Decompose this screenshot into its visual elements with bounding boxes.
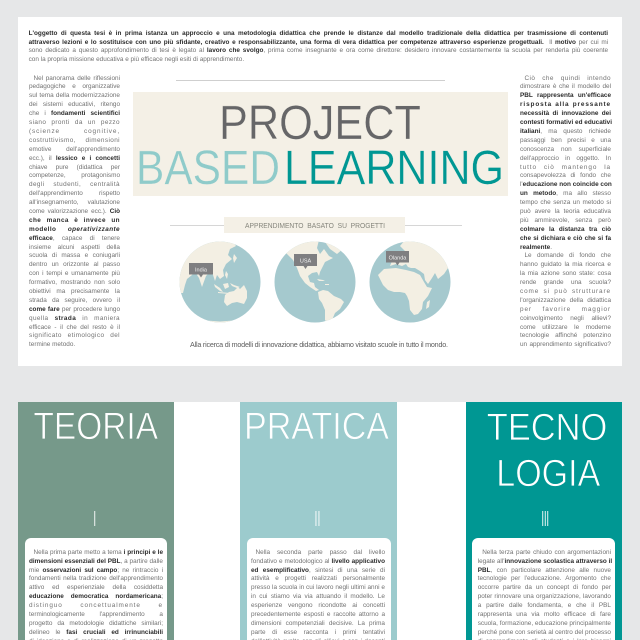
icon: globe India [178,240,260,324]
text block: TECNOLOGIA [478,549,612,640]
text block: left column: degli studenti, centralità [29,181,120,188]
tag: India [189,263,213,278]
text block: right column: tempo che senza un metodo si [520,199,611,206]
tag: USA: USA [300,258,311,264]
text block: right column: un metodo, ma allo stesso [520,190,611,197]
heading: TECNOLOGIA with numeral III: LOGIA [496,453,601,495]
text block: TECNOLOGIA: occorre partire da un concept di fondo per [478,584,611,591]
text block: right column: più ammirevole, senza però [520,217,611,224]
text block: PRATICA: parte di esse racconta i primi tentativi [251,629,385,636]
text block: left column: modello operativizzante [29,226,120,233]
text block: introduction: attraverso lezioni e lo sostituisce con uno più sfidante, creativo e responsabilizzante, una forma di vera didattica per competenze attraverso esperienze progettuali. Il motivo per cui mi [29,39,608,46]
panel: TECNOLOGIA [466,402,622,640]
tag: Olanda [386,251,409,266]
text block: introduction [28,30,608,63]
text block: TEORIA: dimensioni essenziali del PBL, a partire dalle [29,558,163,565]
panel: top white sheet [18,17,622,366]
text block: left column: pedagogiche e organizzative [29,83,120,90]
text block: right column: che si dichiara e ciò che si fa [520,235,611,242]
text block: PRATICA: precedentemente esposti e raccolte attorno a [251,611,385,618]
text block: PRATICA [251,549,385,640]
text block: left column: significato etimologico del [29,332,120,339]
panel: lower white sheet [18,402,622,640]
text block: left column: sul tema della modernizzazione [29,92,120,99]
text block: TECNOLOGIA: rappresenta una via molto efficace di fare [478,611,611,618]
text block: PRATICA: Nella seconda parte passo dal livello [256,549,385,556]
text block: TEORIA: delineo le fasi cruciali ed irrinunciabili [29,629,163,636]
text block: TECNOLOGIA: tecnologie per l'educazione. Argomento che [478,575,611,582]
text block: right column: tecnologie affinché potenzino [520,332,611,339]
text block: right column: risposta alla pressante [520,101,611,108]
panel: TEORIA [18,402,174,640]
tag: India: India [195,268,208,274]
text block: left column: Nel panorama delle riflessioni [34,75,120,82]
text block: left column: all'insegnamento, valutazione [29,199,120,206]
text block: left column: dell'apprendimento rispetto [29,190,120,197]
text block: left column: costruttivismo, dimensioni [29,137,120,144]
text block: PRATICA: presso la scuola in cui lavoro negli ultimi anni e [251,584,385,591]
title: PROJECT: PROJECT [219,97,421,150]
text block: right column: può avere la teoria educativa [520,208,611,215]
subtitle ribbon [170,217,462,233]
text block: TECNOLOGIA: perché pone con serietà al centro del processo [478,629,611,636]
text block: right column: italiani, ma questo richiede [520,128,611,135]
text block: introduction: sono dedicato a questo approfondimento di tesi è legato al lavoro che svolgo, prima come insegnante e ora come direttore: desidero innovare costantemente la scuola per renderla più coerente [29,47,608,54]
text block: TECNOLOGIA: Nella terza parte chiudo con argomentazioni [482,549,611,556]
text block: left column: che manca è invece un [29,217,120,224]
text block: right column: conoscenza non superficiale [520,146,611,153]
text block: left column [29,75,120,348]
text block: right column: necessità di innovazione dei [520,110,611,117]
text block: left column: quella strada in maniera [29,315,120,322]
text block: right column: tutto ciò mantengo la [520,164,611,170]
text block: PRATICA: attività e progetti realizzati personalmente [251,575,385,582]
text block: TEORIA: distinguo concettualmente e [29,602,163,609]
text block: TECNOLOGIA: legate all'innovazione scolastica attraverso il [478,558,612,565]
text block: TEORIA: Nella prima parte metto a tema i principi e le [34,549,163,556]
tag: Olanda: Olanda [389,256,407,262]
text block: right column: come utilizzare le moderne [520,324,611,331]
text block: TECNOLOGIA: PBL, con particolare attenzione alle nuove [478,567,611,574]
text block: left column: ecc.), il lessico e i concetti [29,155,120,162]
card: PRATICA text [247,538,391,640]
text block: right column: passaggi ben precisi e una [520,137,611,144]
text block: right column: la mia azione sono state: cosa [520,270,611,277]
text block: TEORIA: fondamenti nella tradizione dell'apprendimento [29,575,163,582]
text block: right column [520,75,612,348]
text block: left column: dei sistemi educativi, ritengo [29,101,120,108]
text block: left column: efficace - il che del resto è il [29,324,120,331]
tag: USA [294,254,317,269]
text block: left column: competenze, protagonismo [29,172,120,179]
text block: left column: (scienze cognitive, [29,128,120,135]
title: BASED LEARNING [136,142,504,195]
text block: PRATICA: ed esemplificativo, sintesi di una serie di [251,567,385,574]
text block: right column: un apprendimento significativo? [520,341,611,348]
text block: right column: realmente. [520,244,552,251]
icon: globe Olanda [370,240,452,322]
text block: TECNOLOGIA: a partire dalle fondamenta, e che il PBL [478,602,611,609]
text block: TEORIA: educazione democratica nordamericana; [29,593,163,600]
text block: left column: come fare per procedere lungo [29,306,120,313]
text block: left column: che i fondamenti scientifici [29,110,120,117]
text block: introduction: L'oggetto di questa tesi è in prima istanza un approccio e una metodologia didattica che prende le distanze dal modello tradizionale della didattica per trasmissione di contenuti [29,30,608,37]
text block: TEORIA: mie osservazioni sul campo; ne rintraccio i [29,567,163,574]
text block: right column: consapevolezza di fondo che [520,172,611,179]
text block: left column: come valorizzazione ecc.). Ciò [29,208,120,215]
panel: PRATICA [240,402,397,640]
text block: right column: coinvolgimento negli allievi? [520,315,611,322]
text block: right column: rende grande una scuola? [520,279,611,286]
text block: left column: con i tempi e umanamente più [29,270,120,277]
text block: TEORIA: progetto da metodologie didattiche similari; [29,620,163,627]
text block: right column: dell'approccio in oggetto. In [520,155,611,162]
text block: TEORIA: attivo ed esperienziale della cosiddetta [29,584,163,591]
text block: left column: dentro un orizzonte al passo [29,261,120,268]
text block: TECNOLOGIA: poter rinnovare una organizzazione, lavorando [478,593,611,600]
text block: left column: chiave pure (didattica per [29,164,120,170]
text block: right column: come si può strutturare [520,288,611,295]
text block: right column: Le domande di fondo che [524,252,611,259]
heading: TECNOLOGIA with numeral III: TECNO [486,407,607,449]
heading: TECNOLOGIA with numeral III [486,407,607,526]
text block: PRATICA: fondativo e metodologico al livello applicativo [251,558,385,565]
caption: Alla ricerca di modelli di innovazione didattica, abbiamo visitato scuole in tutto il mondo. [190,340,448,349]
text block: right column: dimostrare è che il modello del [520,83,611,90]
text block: left column: efficace, capace di tenere [29,235,120,242]
card: TEORIA text [24,538,167,640]
text block: right column: colmare la distanza tra ciò [520,226,611,233]
text block: left column: termine metodo. [29,341,75,348]
text block: left column: siano pronti da un pezzo [29,119,120,126]
divider: top rule [176,80,445,81]
text block: TECNOLOGIA: scuola, formazione, educazione principalmente [478,620,611,627]
text block: left column: formativo, mostrando non solo [29,279,120,286]
text block: right column: hanno guidato la mia ricerca e [520,261,611,268]
text block: PRATICA: esperienze vengono ricondotte ai concetti [251,602,385,609]
text block: left column: insieme alcuni aspetti della [29,244,120,251]
text block: introduction: con la propria missione educativa e più efficace negli esiti di apprendimento. [29,56,244,63]
text block: left column: emotive dell'apprendimento [29,146,120,153]
title banner [133,92,508,196]
text block: right column: l'educazione non coincide con [520,181,612,188]
text block: right column: contesti formativi ed educativi [520,119,612,126]
text block: PRATICA: in cui stiamo via via attuando il modello. Le [251,593,385,600]
text block: TEORIA: terminologicamente l'apprendimento a [29,611,163,618]
subtitle ribbon: APPRENDIMENTO BASATO SU PROGETTI [245,221,385,230]
text block: right column: Ciò che quindi intendo [524,75,611,82]
text block: right column: PBL rappresenta un'efficace [520,92,611,99]
text block: left column: obiettivi ma precisamente la [29,288,120,295]
card: TECNOLOGIA text [472,538,615,640]
icon: globe USA [274,240,356,324]
text block: left column: scuola di massa e coniugarli [29,252,120,259]
globes with location tags [180,242,450,322]
text block: left column: strada da seguire, ovvero il [29,297,120,304]
text block: right column: l'organizzazione della didattica [520,297,611,304]
text block: PRATICA: dimensioni competenziali decisive. La prima [251,620,385,627]
heading: TEORIA with numeral I: TEORIA [34,406,159,448]
title: BASED LEARNING: BASED [136,142,280,195]
text block: TEORIA [29,549,163,640]
text block: right column: per favorire maggior [520,306,611,313]
